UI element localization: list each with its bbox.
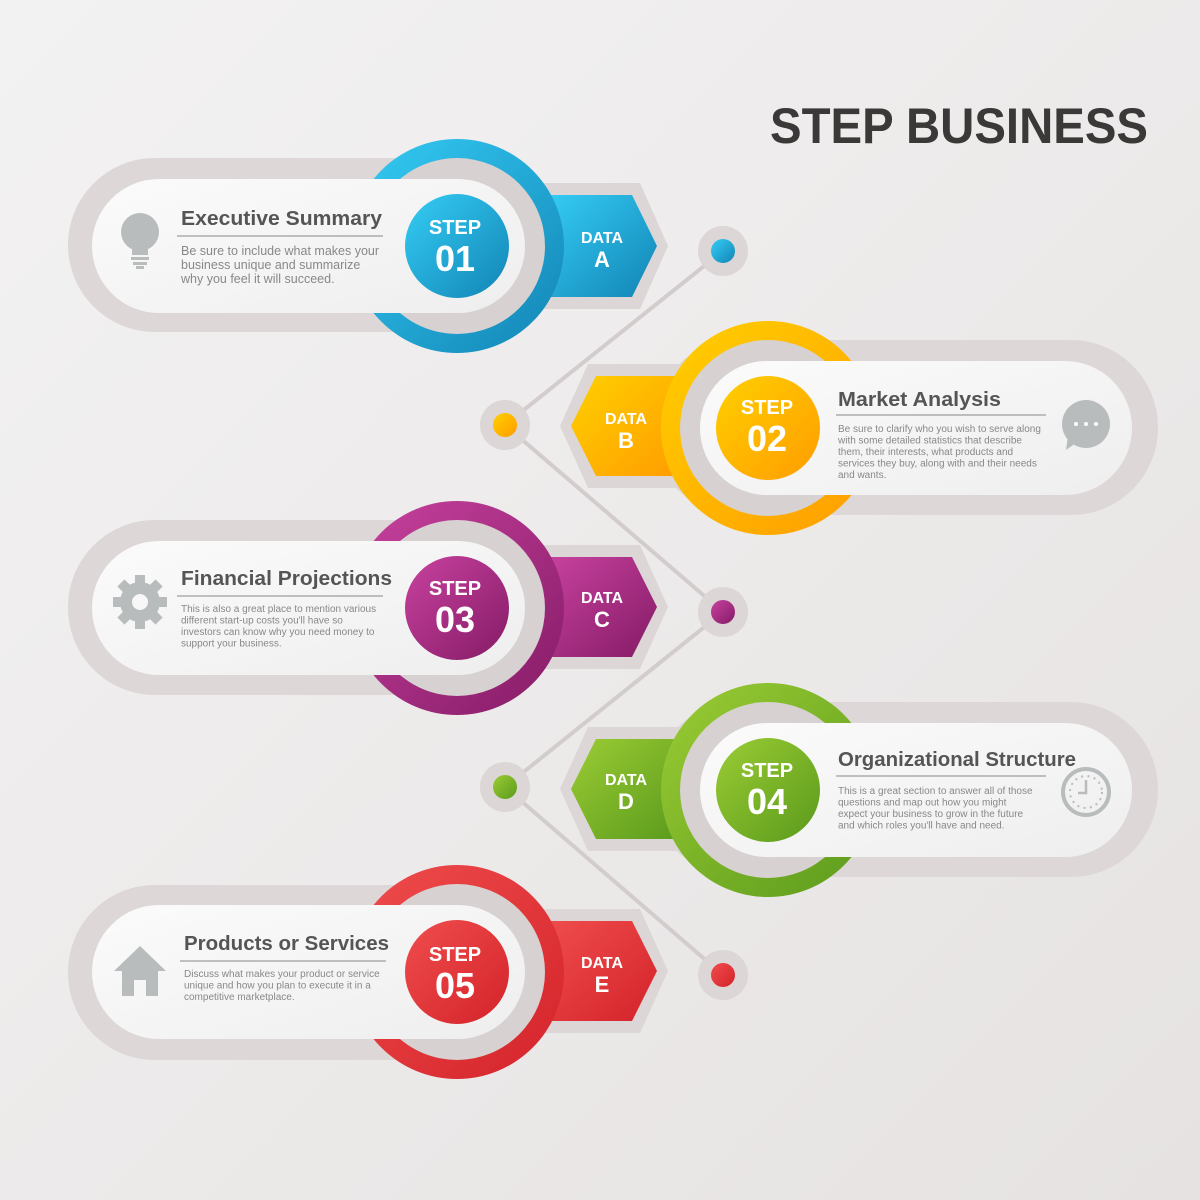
body text: Be sure to include what makes your xyxy=(181,244,379,258)
step 04 badge: 04 xyxy=(747,781,787,822)
step 02 badge: STEP xyxy=(741,397,793,419)
step 03 badge: 03 xyxy=(435,599,475,640)
icon: gear xyxy=(113,575,167,629)
data tab D xyxy=(560,727,688,851)
dot A xyxy=(698,226,748,276)
panel: step 03 xyxy=(68,501,668,715)
heading: Financial Projections xyxy=(181,568,392,590)
step 05 badge: 05 xyxy=(435,965,475,1006)
icon: house xyxy=(114,946,166,996)
body text: different start-up costs you'll have so xyxy=(181,616,343,626)
title: STEP BUSINESS xyxy=(770,98,1148,154)
panel: step 04 xyxy=(560,683,1158,897)
heading: Products or Services xyxy=(184,933,389,955)
step 02 badge: 02 xyxy=(747,418,787,459)
body text: This is also a great place to mention various xyxy=(181,604,376,615)
data tab B: B xyxy=(618,428,634,453)
step 01 badge: 01 xyxy=(435,238,475,279)
step 05 badge xyxy=(405,920,509,1024)
connector lines xyxy=(505,251,723,975)
data tab B xyxy=(560,364,688,488)
body text: and wants. xyxy=(838,470,886,481)
data tab E: DATA xyxy=(581,955,623,972)
data tab C: C xyxy=(594,607,610,632)
dot C xyxy=(698,587,748,637)
body text: expect your business to grow in the future xyxy=(838,809,1024,820)
heading: Market Analysis xyxy=(838,389,1001,411)
data tab C: DATA xyxy=(581,590,623,607)
dot E xyxy=(698,950,748,1000)
step 03 badge: STEP xyxy=(429,578,481,600)
data tab A: A xyxy=(594,247,610,272)
body text: Discuss what makes your product or service xyxy=(184,969,380,980)
icon: speech bubble xyxy=(1062,400,1110,450)
body text: business unique and summarize xyxy=(181,258,360,272)
heading: Executive Summary xyxy=(181,208,383,230)
step 05 badge: STEP xyxy=(429,944,481,966)
data tab D: D xyxy=(618,789,634,814)
step 04 badge xyxy=(716,738,820,842)
panel: step 05 xyxy=(68,865,668,1079)
panel: step 01 xyxy=(68,139,668,353)
body text: them, their interests, what products and xyxy=(838,447,1013,458)
data tab E xyxy=(540,909,668,1033)
icon: clock xyxy=(1063,769,1109,815)
body text: unique and how you plan to execute it in a xyxy=(184,980,371,992)
body text: investors can know why you need money to xyxy=(181,627,375,638)
body text: why you feel it will succeed. xyxy=(180,272,335,286)
panel: step 02 xyxy=(560,321,1158,535)
body text: Be sure to clarify who you wish to serve along xyxy=(838,424,1041,435)
data tab D: DATA xyxy=(605,772,647,789)
data tab A xyxy=(540,183,668,309)
body text: This is a great section to answer all of those xyxy=(838,786,1033,797)
step 02 badge xyxy=(716,376,820,480)
dot D xyxy=(480,762,530,812)
step 01 badge: STEP xyxy=(429,217,481,239)
body text: questions and map out how you might xyxy=(838,798,1007,808)
icon: lightbulb xyxy=(121,213,159,269)
data tab C xyxy=(540,545,668,669)
step 03 badge xyxy=(405,556,509,660)
body text: with some detailed statistics that describe xyxy=(837,436,1022,446)
data tab E: E xyxy=(595,972,609,997)
body text: competitive marketplace. xyxy=(184,992,295,1003)
step 04 badge: STEP xyxy=(741,760,793,782)
body text: services they buy, along with and their needs xyxy=(838,458,1037,470)
dot B xyxy=(480,400,530,450)
heading: Organizational Structure xyxy=(838,749,1076,771)
body text: support your business. xyxy=(181,638,282,650)
body text: and which roles you'll have and need. xyxy=(838,820,1004,832)
data tab A: DATA xyxy=(581,230,623,247)
data tab B: DATA xyxy=(605,411,647,428)
step 01 badge xyxy=(405,194,509,298)
